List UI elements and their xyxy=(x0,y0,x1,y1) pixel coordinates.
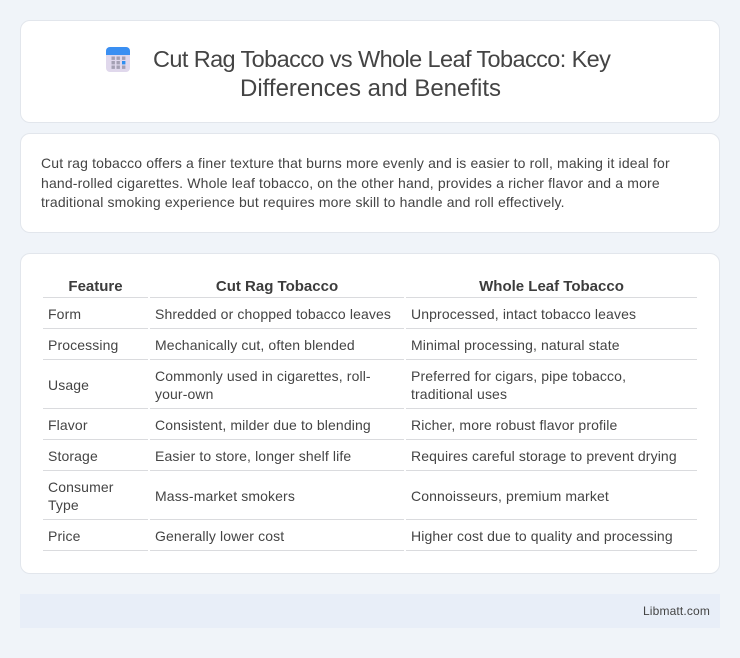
row: price xyxy=(48,528,673,544)
row: consumer type: Mass-market smokers xyxy=(155,488,295,504)
row: flavor: Richer, more robust flavor profile xyxy=(411,417,617,433)
row: consumer type: Connoisseurs, premium market xyxy=(411,488,609,504)
intro paragraph xyxy=(41,155,670,210)
panel: title card xyxy=(20,20,720,123)
row: processing: Processing xyxy=(48,337,118,353)
footer bar xyxy=(20,594,720,628)
row: consumer type xyxy=(48,479,609,513)
row: usage xyxy=(48,368,626,402)
row: storage xyxy=(48,448,677,464)
row: usage: your-own xyxy=(155,386,214,402)
row: form: Shredded or chopped tobacco leaves xyxy=(155,306,391,322)
panel: comparison table xyxy=(20,253,720,574)
intro paragraph: Cut rag tobacco offers a finer texture that burns more evenly and is easier to roll, making it ideal for xyxy=(41,155,670,171)
table header: Cut Rag Tobacco xyxy=(216,278,338,295)
footer credit: Libmatt.com xyxy=(643,604,710,618)
title: Cut Rag Tobacco vs Whole Leaf Tobacco: Key xyxy=(153,46,610,72)
row: processing: Minimal processing, natural state xyxy=(411,337,620,353)
row: price: Price xyxy=(48,528,80,544)
table header xyxy=(68,278,624,295)
title xyxy=(153,46,611,102)
row: usage: Commonly used in cigarettes, roll- xyxy=(155,368,371,384)
row: storage: Easier to store, longer shelf life xyxy=(155,448,351,464)
panel: intro text xyxy=(20,133,720,233)
row: usage: Preferred for cigars, pipe tobacco, xyxy=(411,368,626,384)
row: consumer type: Type xyxy=(48,497,79,513)
comparison table xyxy=(43,278,697,551)
row: form xyxy=(48,306,636,322)
intro paragraph: hand-rolled cigarettes. Whole leaf tobacco, on the other hand, provides a richer flavor and a more xyxy=(41,175,660,191)
row: flavor: Flavor xyxy=(48,417,88,433)
intro paragraph: traditional smoking experience but requires more skill to handle and roll effectively. xyxy=(41,194,565,210)
row: price: Higher cost due to quality and processing xyxy=(411,528,673,544)
row: flavor xyxy=(48,417,617,433)
row: usage: Usage xyxy=(48,377,89,393)
row: flavor: Consistent, milder due to blending xyxy=(155,417,371,433)
icon: calendar xyxy=(106,47,130,72)
row: storage: Storage xyxy=(48,448,98,464)
title: Differences and Benefits xyxy=(240,75,501,102)
table header: Whole Leaf Tobacco xyxy=(479,278,624,295)
row: usage: traditional uses xyxy=(411,386,507,402)
row: price: Generally lower cost xyxy=(155,528,284,544)
row: processing: Mechanically cut, often blended xyxy=(155,337,355,353)
row: processing xyxy=(48,337,620,353)
row: form: Unprocessed, intact tobacco leaves xyxy=(411,306,636,322)
row: form: Form xyxy=(48,306,81,322)
row: storage: Requires careful storage to prevent drying xyxy=(411,448,677,464)
table header: Feature xyxy=(68,278,123,295)
row: consumer type: Consumer xyxy=(48,479,114,495)
